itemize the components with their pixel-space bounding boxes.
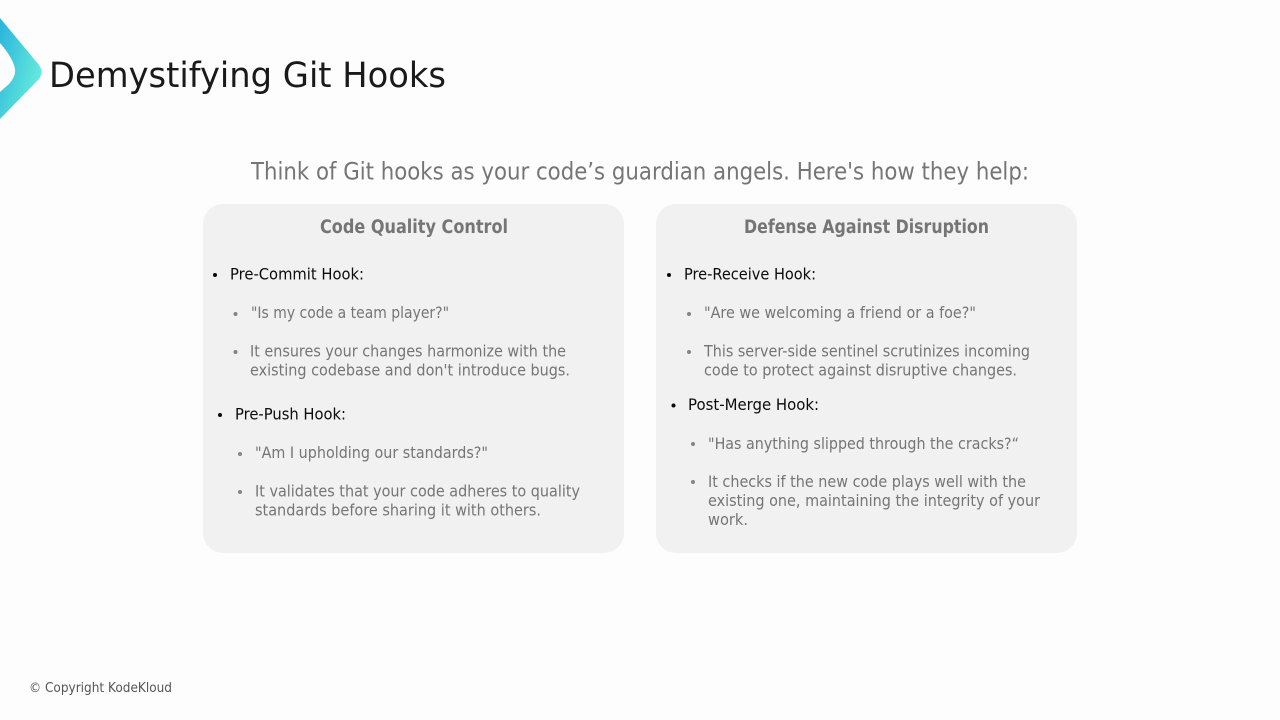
post-merge hook block: Post-Merge Hook: (688, 395, 819, 414)
post-merge hook block: It checks if the new code plays well with the (708, 472, 1026, 491)
panel: defense against disruption (656, 204, 1077, 553)
pre-commit hook block: Pre-Commit Hook: (230, 264, 364, 284)
copyright footer: © Copyright KodeKloud (29, 681, 172, 696)
heading: code quality control: Code Quality Control (320, 217, 508, 238)
pre-receive hook block (667, 264, 1030, 380)
post-merge hook block: work. (708, 510, 748, 529)
post-merge hook block (672, 395, 1040, 529)
pre-receive hook block: Pre-Receive Hook: (684, 264, 816, 284)
pre-commit hook block (213, 264, 570, 380)
pre-receive hook block: code to protect against disruptive changes. (704, 360, 1017, 380)
pre-commit hook block: "Is my code a team player?" (251, 303, 449, 322)
panel: code quality control (203, 204, 624, 553)
heading: defense against disruption: Defense Against Disruption (744, 217, 989, 238)
post-merge hook block: existing one, maintaining the integrity of your (708, 491, 1040, 510)
icon: chevron logo (0, 18, 42, 119)
pre-commit hook block: existing codebase and don't introduce bugs. (250, 360, 570, 380)
title: Demystifying Git Hooks (49, 56, 446, 96)
pre-push hook block: It validates that your code adheres to quality (255, 482, 580, 500)
pre-receive hook block: "Are we welcoming a friend or a foe?" (704, 303, 976, 322)
pre-push hook block (218, 404, 580, 520)
subtitle: Think of Git hooks as your code’s guardian angels. Here's how they help: (250, 158, 1029, 186)
pre-receive hook block: This server-side sentinel scrutinizes incoming (703, 342, 1030, 360)
pre-push hook block: standards before sharing it with others. (255, 500, 541, 520)
pre-push hook block: "Am I upholding our standards?" (255, 443, 488, 462)
pre-commit hook block: It ensures your changes harmonize with the (250, 342, 566, 360)
post-merge hook block: "Has anything slipped through the cracks?“ (708, 434, 1019, 453)
pre-push hook block: Pre-Push Hook: (235, 404, 346, 424)
